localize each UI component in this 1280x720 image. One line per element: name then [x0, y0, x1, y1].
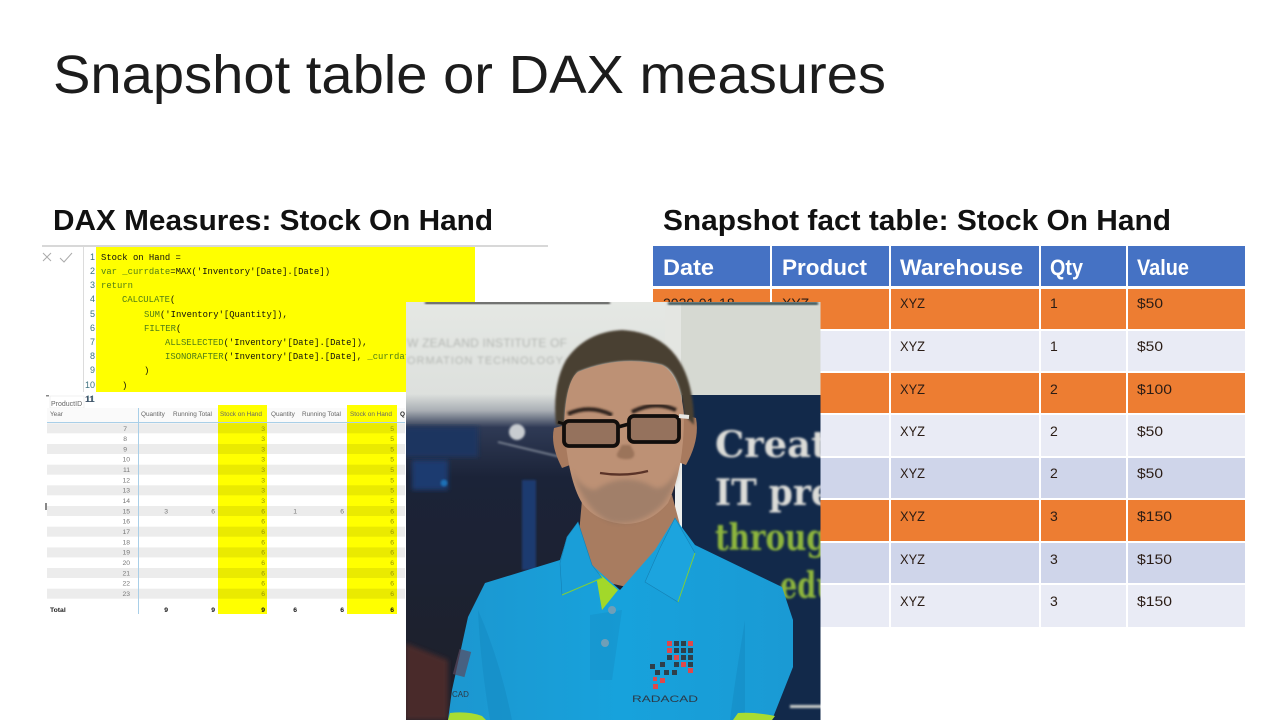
table row 7: 3 — [1050, 551, 1058, 567]
panel: matrix visual screenshot: Running Total — [173, 411, 212, 418]
panel: matrix visual screenshot: 11 — [123, 467, 130, 474]
table header row: Qty — [1050, 255, 1084, 280]
table row 1: 1 — [1050, 295, 1058, 311]
panel: matrix visual screenshot: Quantity — [271, 411, 296, 418]
panel: matrix visual screenshot: 22 — [122, 581, 130, 588]
table row 3 — [653, 373, 1245, 413]
RADACAD logo — [632, 641, 698, 705]
panel: matrix visual screenshot: 6 — [211, 508, 215, 515]
panel: DAX formula editor screenshot: 3 — [90, 280, 95, 290]
title: Snapshot table or DAX measures — [53, 45, 886, 105]
panel: matrix visual screenshot: 5 — [390, 446, 394, 453]
panel: matrix visual screenshot: 3 — [261, 498, 265, 505]
table row 2 — [653, 331, 1245, 371]
table header row: Warehouse — [900, 255, 1023, 280]
panel: matrix visual screenshot: 5 — [390, 477, 394, 484]
table row 8: XYZ — [900, 593, 925, 609]
panel: matrix visual screenshot: 5 — [390, 426, 394, 433]
panel: DAX formula editor screenshot: var _currdate=MAX('Inventory'[Date].[Date]) — [101, 267, 330, 277]
panel: matrix visual screenshot: 7 — [123, 426, 127, 433]
table row 6: $150 — [1137, 508, 1172, 524]
table row 1: XYZ — [782, 295, 810, 311]
presenter photo — [405, 302, 836, 720]
panel: DAX formula editor screenshot: 1 — [90, 252, 95, 262]
panel: matrix visual screenshot: 5 — [390, 498, 394, 505]
panel: DAX formula editor screenshot: 4 — [90, 294, 95, 304]
panel: matrix visual screenshot: 3 — [164, 508, 168, 515]
table row 2: XYZ — [900, 338, 925, 354]
table row 7: XYZ — [900, 551, 925, 567]
panel: matrix visual screenshot: 3 — [261, 477, 265, 484]
panel: matrix visual screenshot: 20 — [122, 560, 130, 567]
table row 3: 2 — [1050, 381, 1058, 397]
panel: matrix visual screenshot: 9 — [261, 607, 265, 614]
panel: matrix visual screenshot: 6 — [261, 519, 265, 526]
panel: matrix visual screenshot: 12 — [122, 477, 130, 484]
panel: matrix visual screenshot: ProductID — [51, 401, 82, 408]
table row 7: $150 — [1137, 551, 1172, 567]
face — [564, 361, 684, 524]
panel: matrix visual screenshot: 6 — [390, 550, 394, 557]
table row 4: $50 — [1137, 423, 1163, 439]
panel: matrix visual screenshot — [45, 394, 405, 614]
panel: DAX formula editor screenshot: CALCULATE( — [122, 295, 175, 305]
panel: matrix visual screenshot: 21 — [122, 570, 130, 577]
glasses — [558, 416, 689, 446]
photo background — [405, 302, 836, 720]
panel: matrix visual screenshot: 6 — [390, 581, 394, 588]
panel: DAX formula editor screenshot: 10 — [85, 380, 95, 390]
eyebrows — [568, 405, 676, 415]
panel: DAX formula editor screenshot: 11 — [86, 394, 95, 404]
panel: DAX formula editor screenshot: ) — [122, 381, 127, 391]
panel: matrix visual screenshot: 6 — [261, 539, 265, 546]
ears — [553, 415, 697, 468]
photo background: throug — [715, 517, 827, 559]
panel: matrix visual screenshot: 5 — [390, 436, 394, 443]
table row 3: XYZ — [900, 381, 925, 397]
panel: matrix visual screenshot: Running Total — [302, 411, 341, 418]
panel: matrix visual screenshot: 6 — [261, 508, 265, 515]
panel: matrix visual screenshot: 9 — [164, 607, 168, 614]
panel: matrix visual screenshot: 17 — [122, 529, 130, 536]
panel: matrix visual screenshot: 6 — [390, 539, 394, 546]
panel: matrix visual screenshot: 6 — [261, 560, 265, 567]
placket and buttons — [590, 606, 622, 680]
panel: matrix visual screenshot: 3 — [261, 436, 265, 443]
panel: matrix visual screenshot: 6 — [390, 570, 394, 577]
table row 5 — [653, 458, 1245, 498]
panel: matrix visual screenshot: 6 — [340, 607, 344, 614]
table row 1: 2020-01-18 — [663, 295, 735, 311]
panel: DAX formula editor screenshot: ) — [144, 366, 149, 376]
panel: matrix visual screenshot: 6 — [390, 560, 394, 567]
table row 8: 3 — [1050, 593, 1058, 609]
panel: matrix visual screenshot: 1 — [293, 508, 297, 515]
panel: matrix visual screenshot: Year — [50, 411, 64, 418]
photo background: IT pre — [715, 472, 833, 514]
panel: matrix visual screenshot: 3 — [261, 488, 265, 495]
mouth — [600, 471, 648, 475]
table row 4: 2 — [1050, 423, 1058, 439]
panel: matrix visual screenshot: 6 — [390, 591, 394, 598]
panel: matrix visual screenshot: 6 — [390, 529, 394, 536]
lime undershirt — [596, 572, 618, 610]
panel: matrix visual screenshot: 16 — [122, 519, 130, 526]
panel: DAX formula editor screenshot: 7 — [90, 337, 95, 347]
sleeve logo — [452, 649, 471, 699]
panel: matrix visual screenshot: 6 — [390, 508, 394, 515]
table header row: Value — [1137, 255, 1189, 280]
table stripes — [47, 423, 405, 599]
shirt folds — [478, 610, 745, 720]
photo background: W ZEALAND INSTITUTE OF — [407, 336, 567, 350]
panel: matrix visual screenshot: 6 — [293, 607, 297, 614]
panel: matrix visual screenshot: Total — [50, 607, 66, 614]
stubble — [572, 465, 680, 523]
table header row: Product — [782, 255, 868, 280]
panel: matrix visual screenshot: 5 — [390, 457, 394, 464]
panel: DAX formula editor screenshot: FILTER( — [144, 324, 181, 334]
table row 2: 1 — [1050, 338, 1058, 354]
table row 3: $100 — [1137, 381, 1172, 397]
panel: matrix visual screenshot: 19 — [122, 550, 130, 557]
panel: matrix visual screenshot: 14 — [122, 498, 130, 505]
panel: matrix visual screenshot: 5 — [390, 467, 394, 474]
panel: DAX formula editor screenshot: 2 — [90, 266, 95, 276]
panel: matrix visual screenshot: 6 — [390, 519, 394, 526]
table row 8 — [653, 585, 1245, 627]
panel: matrix visual screenshot: 6 — [261, 570, 265, 577]
panel: matrix visual screenshot: 6 — [340, 508, 344, 515]
table row 5: 2 — [1050, 465, 1058, 481]
panel: matrix visual screenshot: 9 — [211, 607, 215, 614]
panel: matrix visual screenshot: Stock on Hand — [220, 411, 262, 418]
panel: matrix visual screenshot: 6 — [261, 581, 265, 588]
polo shirt — [448, 518, 793, 720]
panel: DAX formula editor screenshot: ALLSELECTED('Inventory'[Date].[Date]), — [165, 338, 367, 348]
panel: matrix visual screenshot: 3 — [261, 467, 265, 474]
table row 5: XYZ — [900, 465, 925, 481]
panel: matrix visual screenshot: 8 — [123, 436, 127, 443]
panel: matrix visual screenshot: 3 — [261, 457, 265, 464]
highlighted columns — [218, 405, 397, 614]
table row 6: 3 — [1050, 508, 1058, 524]
photo background: edu — [780, 565, 836, 607]
panel: matrix visual screenshot: 6 — [261, 550, 265, 557]
table header row — [653, 246, 1245, 286]
panel: DAX formula editor screenshot: 8 — [90, 351, 95, 361]
hair — [555, 330, 694, 425]
panel: DAX formula editor screenshot — [42, 245, 548, 404]
table row 4: XYZ — [900, 423, 925, 439]
table row 7 — [653, 543, 1245, 583]
table row 1: XYZ — [900, 295, 925, 311]
heading: DAX measures: DAX Measures: Stock On Hand — [53, 205, 493, 237]
panel: matrix visual screenshot: Stock on Hand — [350, 411, 392, 418]
photo background: Creat — [715, 424, 828, 466]
nose shadow — [617, 445, 634, 459]
table row 2: $50 — [1137, 338, 1163, 354]
panel: matrix visual screenshot: 10 — [122, 457, 130, 464]
collar — [560, 518, 695, 602]
snapshot fact table — [653, 246, 1245, 627]
table header row: Date — [663, 255, 714, 280]
table row 5: $50 — [1137, 465, 1163, 481]
panel: matrix visual screenshot: 18 — [122, 539, 130, 546]
neck — [578, 495, 680, 590]
RADACAD logo: RADACAD — [632, 694, 698, 705]
panel: matrix visual screenshot: Q — [400, 411, 405, 418]
photo background: ORMATION TECHNOLOGY — [407, 355, 564, 367]
sleeve cuffs — [448, 712, 775, 720]
panel: matrix visual screenshot: 11 — [85, 394, 94, 404]
panel: matrix visual screenshot: 13 — [122, 488, 130, 495]
panel: DAX formula editor screenshot: 6 — [90, 323, 95, 333]
table row 4 — [653, 415, 1245, 456]
panel: matrix visual screenshot: 6 — [390, 607, 394, 614]
heading: snapshot fact table: Snapshot fact table: Stock On Hand — [663, 205, 1171, 237]
table row 1: $50 — [1137, 295, 1163, 311]
panel: matrix visual screenshot: 3 — [261, 426, 265, 433]
panel: DAX formula editor screenshot: 5 — [90, 309, 95, 319]
table row 6: XYZ — [900, 508, 925, 524]
table row 8: $150 — [1137, 593, 1172, 609]
presenter figure — [448, 330, 793, 720]
panel: matrix visual screenshot: 15 — [122, 508, 130, 515]
panel: DAX formula editor screenshot: SUM('Inventory'[Quantity]), — [144, 310, 288, 320]
table row 1 — [653, 289, 1245, 329]
sleeve logo: CAD — [452, 690, 469, 699]
panel: DAX formula editor screenshot: Stock on Hand = — [101, 253, 181, 263]
table row 6 — [653, 500, 1245, 541]
panel: DAX formula editor screenshot: return — [101, 281, 133, 291]
panel: matrix visual screenshot: 23 — [122, 591, 130, 598]
panel: DAX formula editor screenshot: 9 — [90, 365, 95, 375]
panel: DAX formula editor screenshot: ISONORAFTER('Inventory'[Date].[Date], _currdate — [165, 352, 415, 362]
panel: matrix visual screenshot: 5 — [390, 488, 394, 495]
head — [553, 330, 697, 524]
panel: matrix visual screenshot: 6 — [261, 529, 265, 536]
panel: matrix visual screenshot: Quantity — [141, 411, 166, 418]
panel: matrix visual screenshot: 3 — [261, 446, 265, 453]
panel: matrix visual screenshot: 9 — [123, 446, 127, 453]
panel: matrix visual screenshot: 6 — [261, 591, 265, 598]
